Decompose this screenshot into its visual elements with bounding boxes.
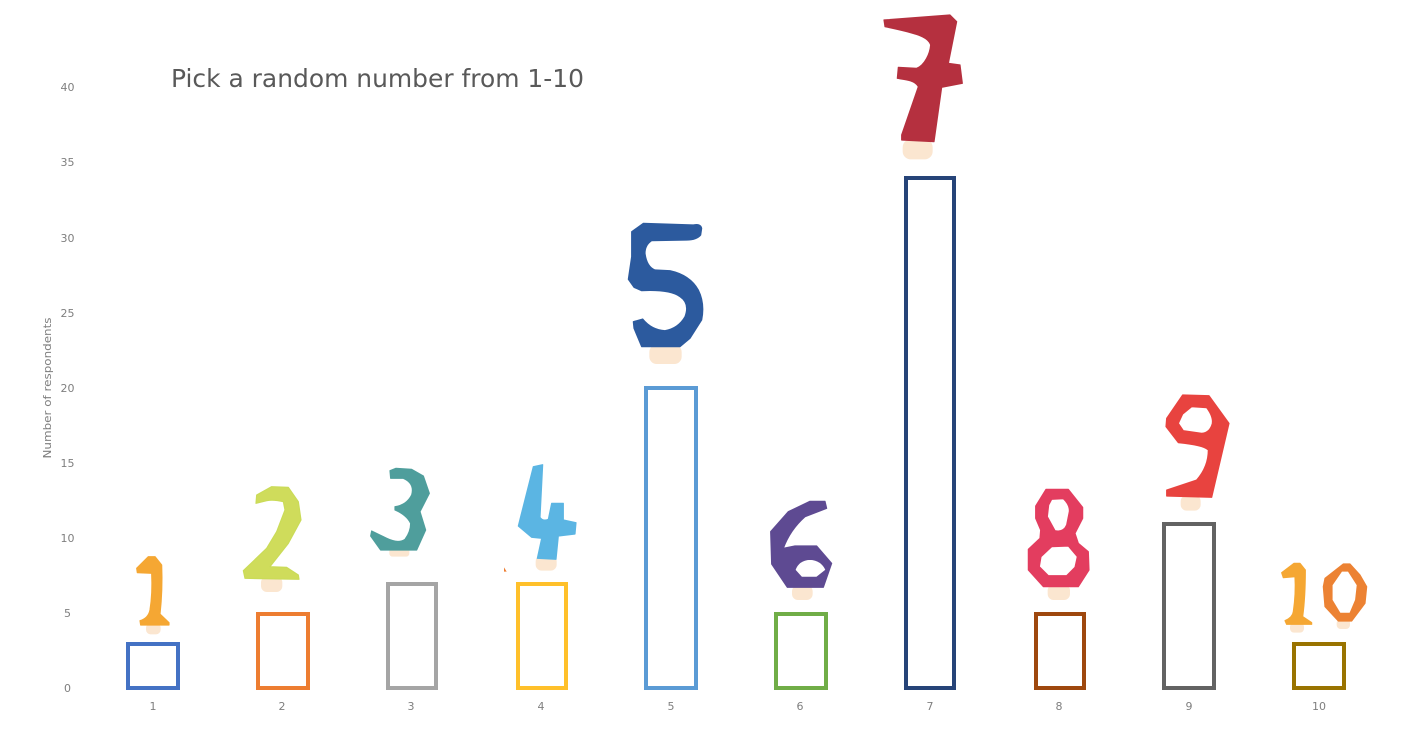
x axis labels (150, 700, 1326, 713)
icon: wooden number 8 (1028, 489, 1089, 600)
x axis labels: 7 (926, 700, 934, 713)
y axis labels: 25 (60, 307, 74, 320)
icon: wooden number 2 (243, 487, 301, 592)
icon: wooden number 5 (628, 223, 703, 364)
bar 7: value 34 (906, 178, 954, 688)
icon: wooden number 9 (1166, 395, 1229, 511)
bar 1: value 3 (128, 644, 178, 688)
x axis labels: 6 (796, 700, 804, 713)
x axis labels: 2 (278, 700, 286, 713)
x axis labels: 8 (1056, 700, 1062, 713)
bar 4: value 7 (518, 584, 566, 688)
bar 6: value 5 (776, 614, 826, 688)
y axis labels: 40 (60, 81, 74, 94)
x axis labels: 10 (1312, 700, 1326, 713)
bar 8: value 5 (1036, 614, 1084, 688)
title: Pick a random number from 1-10 (171, 64, 584, 93)
bar 2: value 5 (258, 614, 308, 688)
y axis labels: 20 (60, 382, 74, 395)
x axis labels: 3 (408, 700, 414, 713)
y axis labels: 5 (64, 607, 71, 620)
x axis labels: 9 (1186, 700, 1192, 713)
y axis labels: 0 (64, 682, 71, 695)
icon: wooden number 6 (771, 501, 832, 600)
icon: wooden number 3 (371, 468, 429, 557)
y axis labels: 35 (60, 156, 74, 169)
bar 9: value 11 (1164, 524, 1214, 688)
y axis labels: 10 (60, 532, 74, 545)
bar 5: value 20 (646, 388, 696, 688)
y axis title: Number of respondents (41, 317, 54, 458)
icon: wooden number 7 (884, 15, 962, 159)
x axis labels: 4 (538, 700, 544, 713)
bar 10: value 3 (1294, 644, 1344, 688)
y axis labels (60, 81, 74, 695)
icon: wooden number 10 (1282, 563, 1367, 633)
y axis labels: 15 (60, 457, 74, 470)
icon: wooden number 1 (137, 557, 169, 634)
bars (128, 178, 1344, 688)
x axis labels: 5 (668, 700, 674, 713)
bar 3: value 7 (388, 584, 436, 688)
x axis labels: 1 (150, 700, 156, 713)
y axis labels: 30 (60, 232, 74, 245)
icon: wooden number 4 (504, 465, 576, 572)
